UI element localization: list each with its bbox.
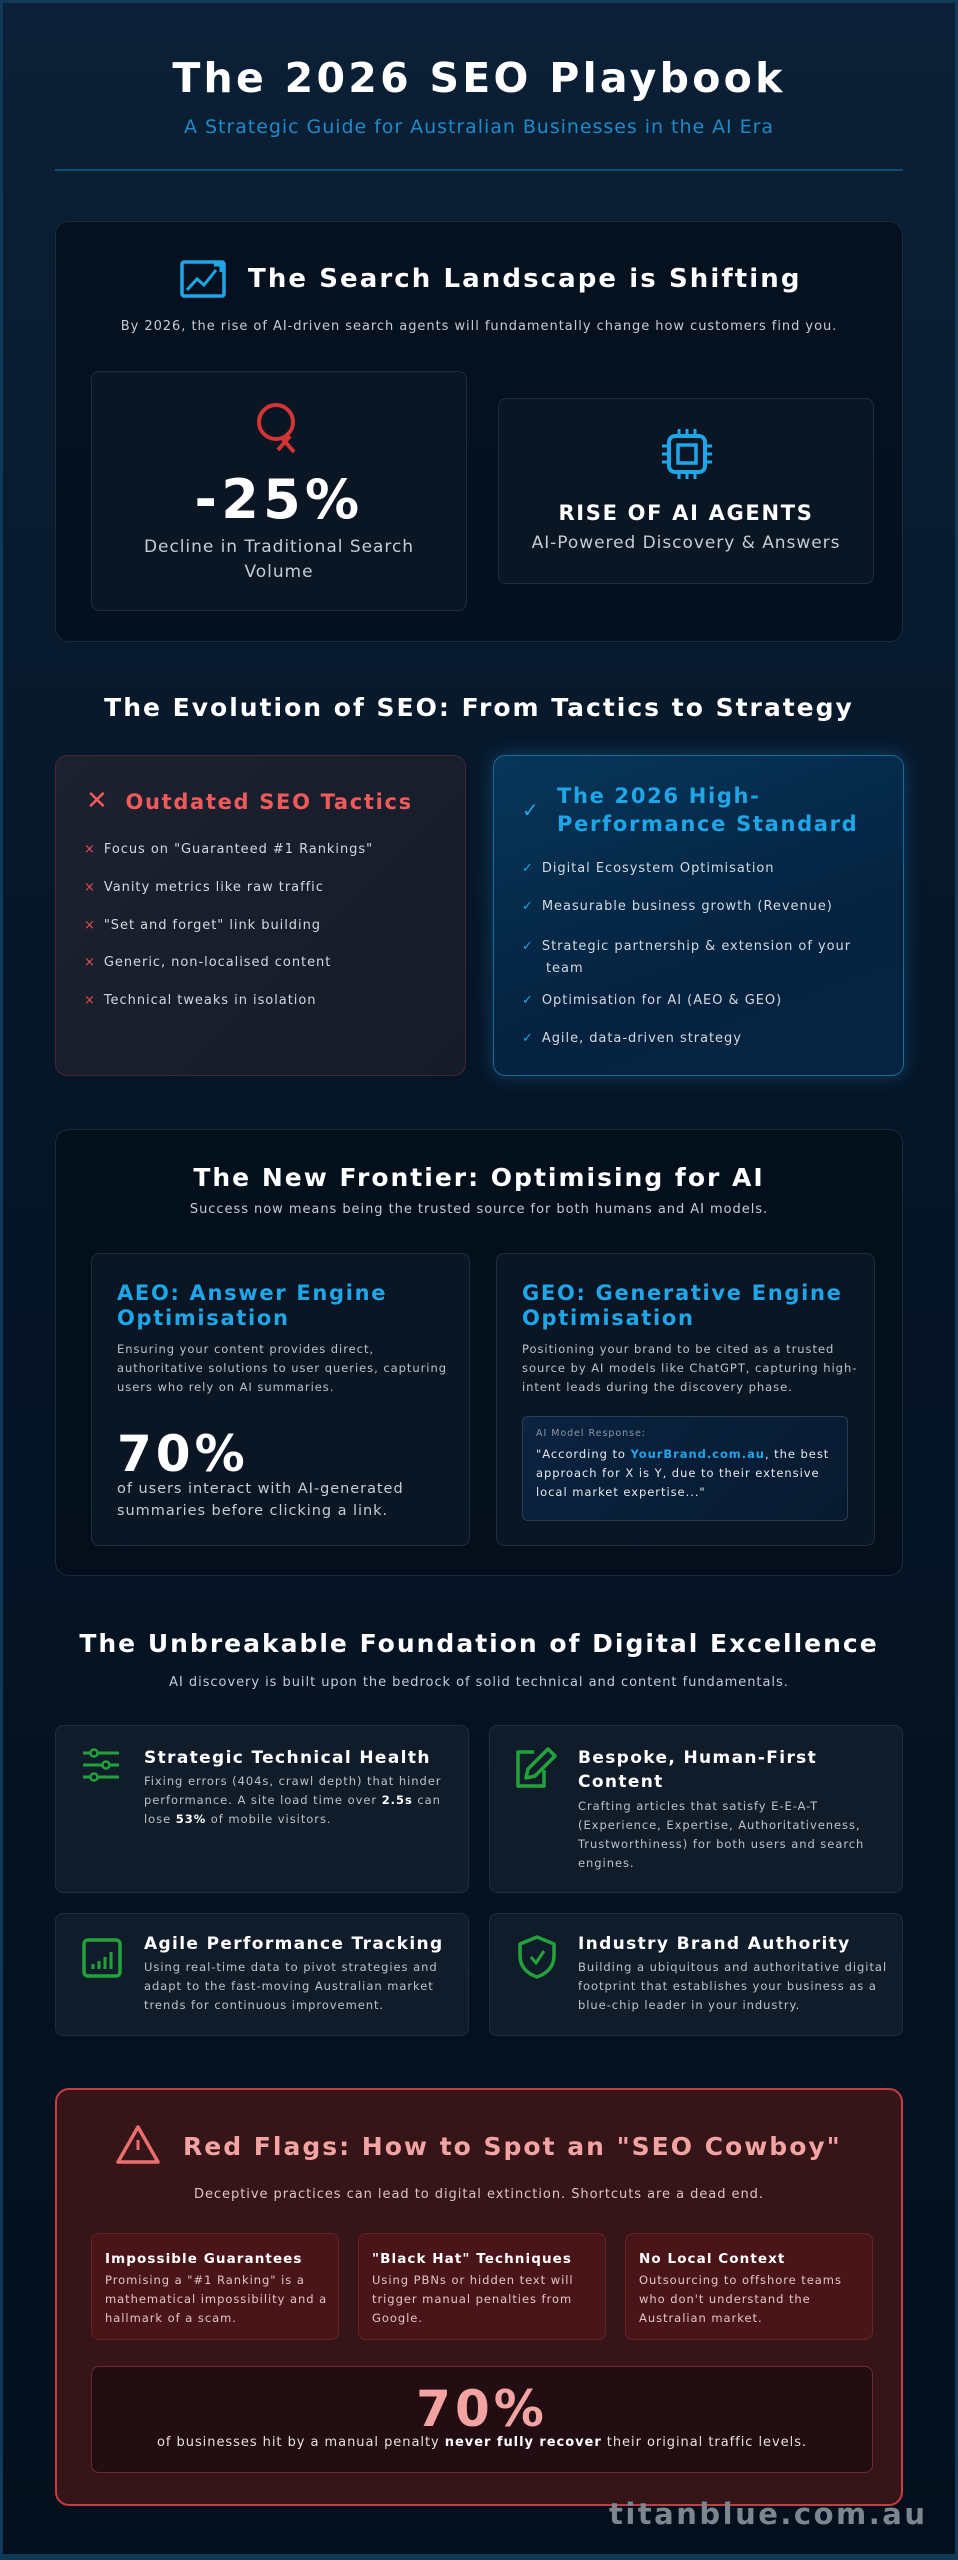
card: GEO: Optimisation (522, 1306, 695, 1330)
card: AEO: AEO: Answer Engine (117, 1281, 387, 1305)
heading: ✕ Outdated SEO Tactics (86, 786, 413, 816)
card: no local context: Outsourcing to offshore teams (639, 2273, 842, 2287)
heading (522, 784, 858, 836)
stat label: Volume (244, 562, 314, 582)
card: performance tracking: Agile Performance Tracking (144, 1934, 444, 1954)
card: GEO (496, 1253, 875, 1546)
panel: outdated tactics (55, 755, 466, 1076)
card: black hat: trigger manual penalties from (372, 2292, 572, 2306)
AI response box: local market expertise..." (536, 1485, 706, 1499)
card: human-first content: Crafting articles that satisfy E-E-A-T (578, 1799, 818, 1813)
card: performance tracking: adapt to the fast-moving Australian market (144, 1979, 434, 1993)
stat: -25% (195, 468, 363, 531)
card: human-first content: Trustworthiness) for both users and search (578, 1837, 864, 1851)
AI response box: approach for X is Y, due to their extensive (536, 1466, 820, 1480)
card: human-first content (489, 1725, 903, 1893)
heading: evolution: The Evolution of SEO: From Tactics to Strategy (104, 693, 854, 722)
card: impossible guarantees (91, 2233, 339, 2340)
card: GEO: GEO: Generative Engine (522, 1281, 843, 1305)
card: technical health: performance. A site load time over 2.5s can (144, 1793, 441, 1807)
icon: pencil (516, 1747, 557, 1788)
heading: foundation: The Unbreakable Foundation of Digital Excellence (79, 1629, 879, 1658)
card: impossible guarantees: Impossible Guarantees (105, 2251, 303, 2267)
stat box: 70% penalty: 70% (416, 2380, 548, 2438)
card: impossible guarantees: mathematical impossibility and a (105, 2292, 327, 2306)
AI response box: AI Model Response: (536, 1428, 646, 1439)
card: technical health: Fixing errors (404s, crawl depth) that hinder (144, 1774, 442, 1788)
card: human-first content: (Experience, Expertise, Authoritativeness, (578, 1818, 861, 1832)
list: × Technical tweaks in isolation (84, 993, 316, 1008)
stat label (144, 537, 414, 582)
heading: ✓ (522, 798, 540, 822)
card: brand authority: footprint that establishes your business as a (578, 1979, 877, 1993)
card: AEO: of users interact with AI-generated (117, 1481, 404, 1497)
intro text: By 2026, the rise of AI-driven search agents will fundamentally change how customers find you. (121, 319, 837, 334)
list: ✓ Measurable business growth (Revenue) (522, 899, 833, 914)
card: -25% (91, 371, 467, 611)
card: AEO: summaries before clicking a link. (117, 1503, 388, 1519)
card: performance tracking (55, 1913, 469, 2036)
card: brand authority: blue-chip leader in your industry. (578, 1998, 800, 2012)
list (522, 861, 851, 1046)
list (84, 842, 373, 1008)
card: AI agents (498, 398, 874, 584)
list: ✓ Strategic partnership & extension of your (522, 939, 851, 954)
card: GEO: source by AI models like ChatGPT, capturing high- (522, 1361, 857, 1375)
card: brand authority (489, 1913, 903, 2036)
icon: sliders (83, 1748, 119, 1782)
stat 70%: 70% (117, 1425, 249, 1483)
card: brand authority: Industry Brand Authority (578, 1934, 851, 1954)
icon: chart (180, 260, 226, 298)
card: performance tracking: Using real-time data to pivot strategies and (144, 1960, 438, 1974)
card: AEO: Optimisation (117, 1306, 290, 1330)
card: AEO (91, 1253, 470, 1546)
sub: foundation: AI discovery is built upon the bedrock of solid technical and content fundamentals. (169, 1675, 789, 1690)
card: black hat: Using PBNs or hidden text will (372, 2273, 574, 2287)
card: GEO: Positioning your brand to be cited as a trusted (522, 1342, 834, 1356)
panel: search landscape (55, 221, 903, 642)
card: technical health: lose 53% of mobile visitors. (144, 1812, 332, 1826)
AI response box (522, 1416, 848, 1521)
card: human-first content: Bespoke, Human-First (578, 1748, 817, 1768)
card: no local context: No Local Context (639, 2251, 785, 2267)
card: no local context (625, 2233, 873, 2340)
card: AI agents: AI-Powered Discovery & Answers (532, 533, 840, 553)
heading: Performance Standard (557, 812, 858, 836)
card: black hat: Google. (372, 2311, 423, 2325)
list: ✓ Agile, data-driven strategy (522, 1031, 742, 1046)
card: performance tracking: trends for continuous improvement. (144, 1998, 384, 2012)
card: impossible guarantees: Promising a "#1 Ranking" is a (105, 2273, 305, 2287)
list: ✓ Digital Ecosystem Optimisation (522, 861, 775, 876)
title: The 2026 SEO Playbook (172, 54, 786, 102)
card: AEO: Ensuring your content provides direct, (117, 1342, 374, 1356)
panel: red flags (55, 2088, 903, 2506)
card: AEO: users who rely on AI summaries. (117, 1380, 334, 1394)
sub: Success now means being the trusted source for both humans and AI models. (190, 1202, 768, 1217)
heading: The Search Landscape is Shifting (248, 264, 802, 294)
subtitle: A Strategic Guide for Australian Businesses in the AI Era (184, 116, 774, 138)
card: impossible guarantees: hallmark of a scam. (105, 2311, 237, 2325)
card: human-first content: Content (578, 1772, 664, 1792)
card: technical health: Strategic Technical Health (144, 1748, 431, 1768)
stat box: 70% penalty: of businesses hit by a manual penalty never fully recover their original traffic levels. (157, 2435, 807, 2450)
sub: Deceptive practices can lead to digital extinction. Shortcuts are a dead end. (194, 2187, 764, 2202)
footer: brand: titanblue.com.au (609, 2497, 927, 2531)
list: × Generic, non-localised content (84, 955, 331, 970)
list: × "Set and forget" link building (84, 918, 321, 933)
list: ✓ Optimisation for AI (AEO & GEO) (522, 993, 782, 1008)
label: RISE OF AI AGENTS (558, 501, 814, 525)
heading: The 2026 High- (557, 784, 761, 808)
list: team (546, 961, 584, 976)
card: GEO: intent leads during the discovery phase. (522, 1380, 793, 1394)
list: × Vanity metrics like raw traffic (84, 880, 324, 895)
card: AEO: authoritative solutions to user queries, capturing (117, 1361, 447, 1375)
stat box: 70% penalty (91, 2366, 873, 2473)
heading: Red Flags: How to Spot an "SEO Cowboy" (183, 2132, 842, 2161)
stat label: Decline in Traditional Search (144, 537, 414, 557)
panel: new frontier (55, 1129, 903, 1576)
card: black hat (358, 2233, 606, 2340)
card: black hat: "Black Hat" Techniques (372, 2251, 572, 2267)
icon: warning (116, 2125, 160, 2164)
card: brand authority: Building a ubiquitous and authoritative digital (578, 1960, 887, 1974)
card: technical health (55, 1725, 469, 1893)
AI response box: "According to YourBrand.com.au, the best (536, 1447, 829, 1461)
card: no local context: Australian market. (639, 2311, 763, 2325)
icon: search cross (257, 403, 296, 454)
card: no local context: who don't understand the (639, 2292, 811, 2306)
heading: The New Frontier: Optimising for AI (193, 1163, 765, 1192)
panel: 2026 standard (493, 755, 904, 1076)
icon: chip (662, 429, 712, 479)
icon: shield check (518, 1935, 556, 1979)
card: human-first content: engines. (578, 1856, 635, 1870)
list: × Focus on "Guaranteed #1 Rankings" (84, 842, 373, 857)
icon: bar chart (82, 1938, 122, 1978)
